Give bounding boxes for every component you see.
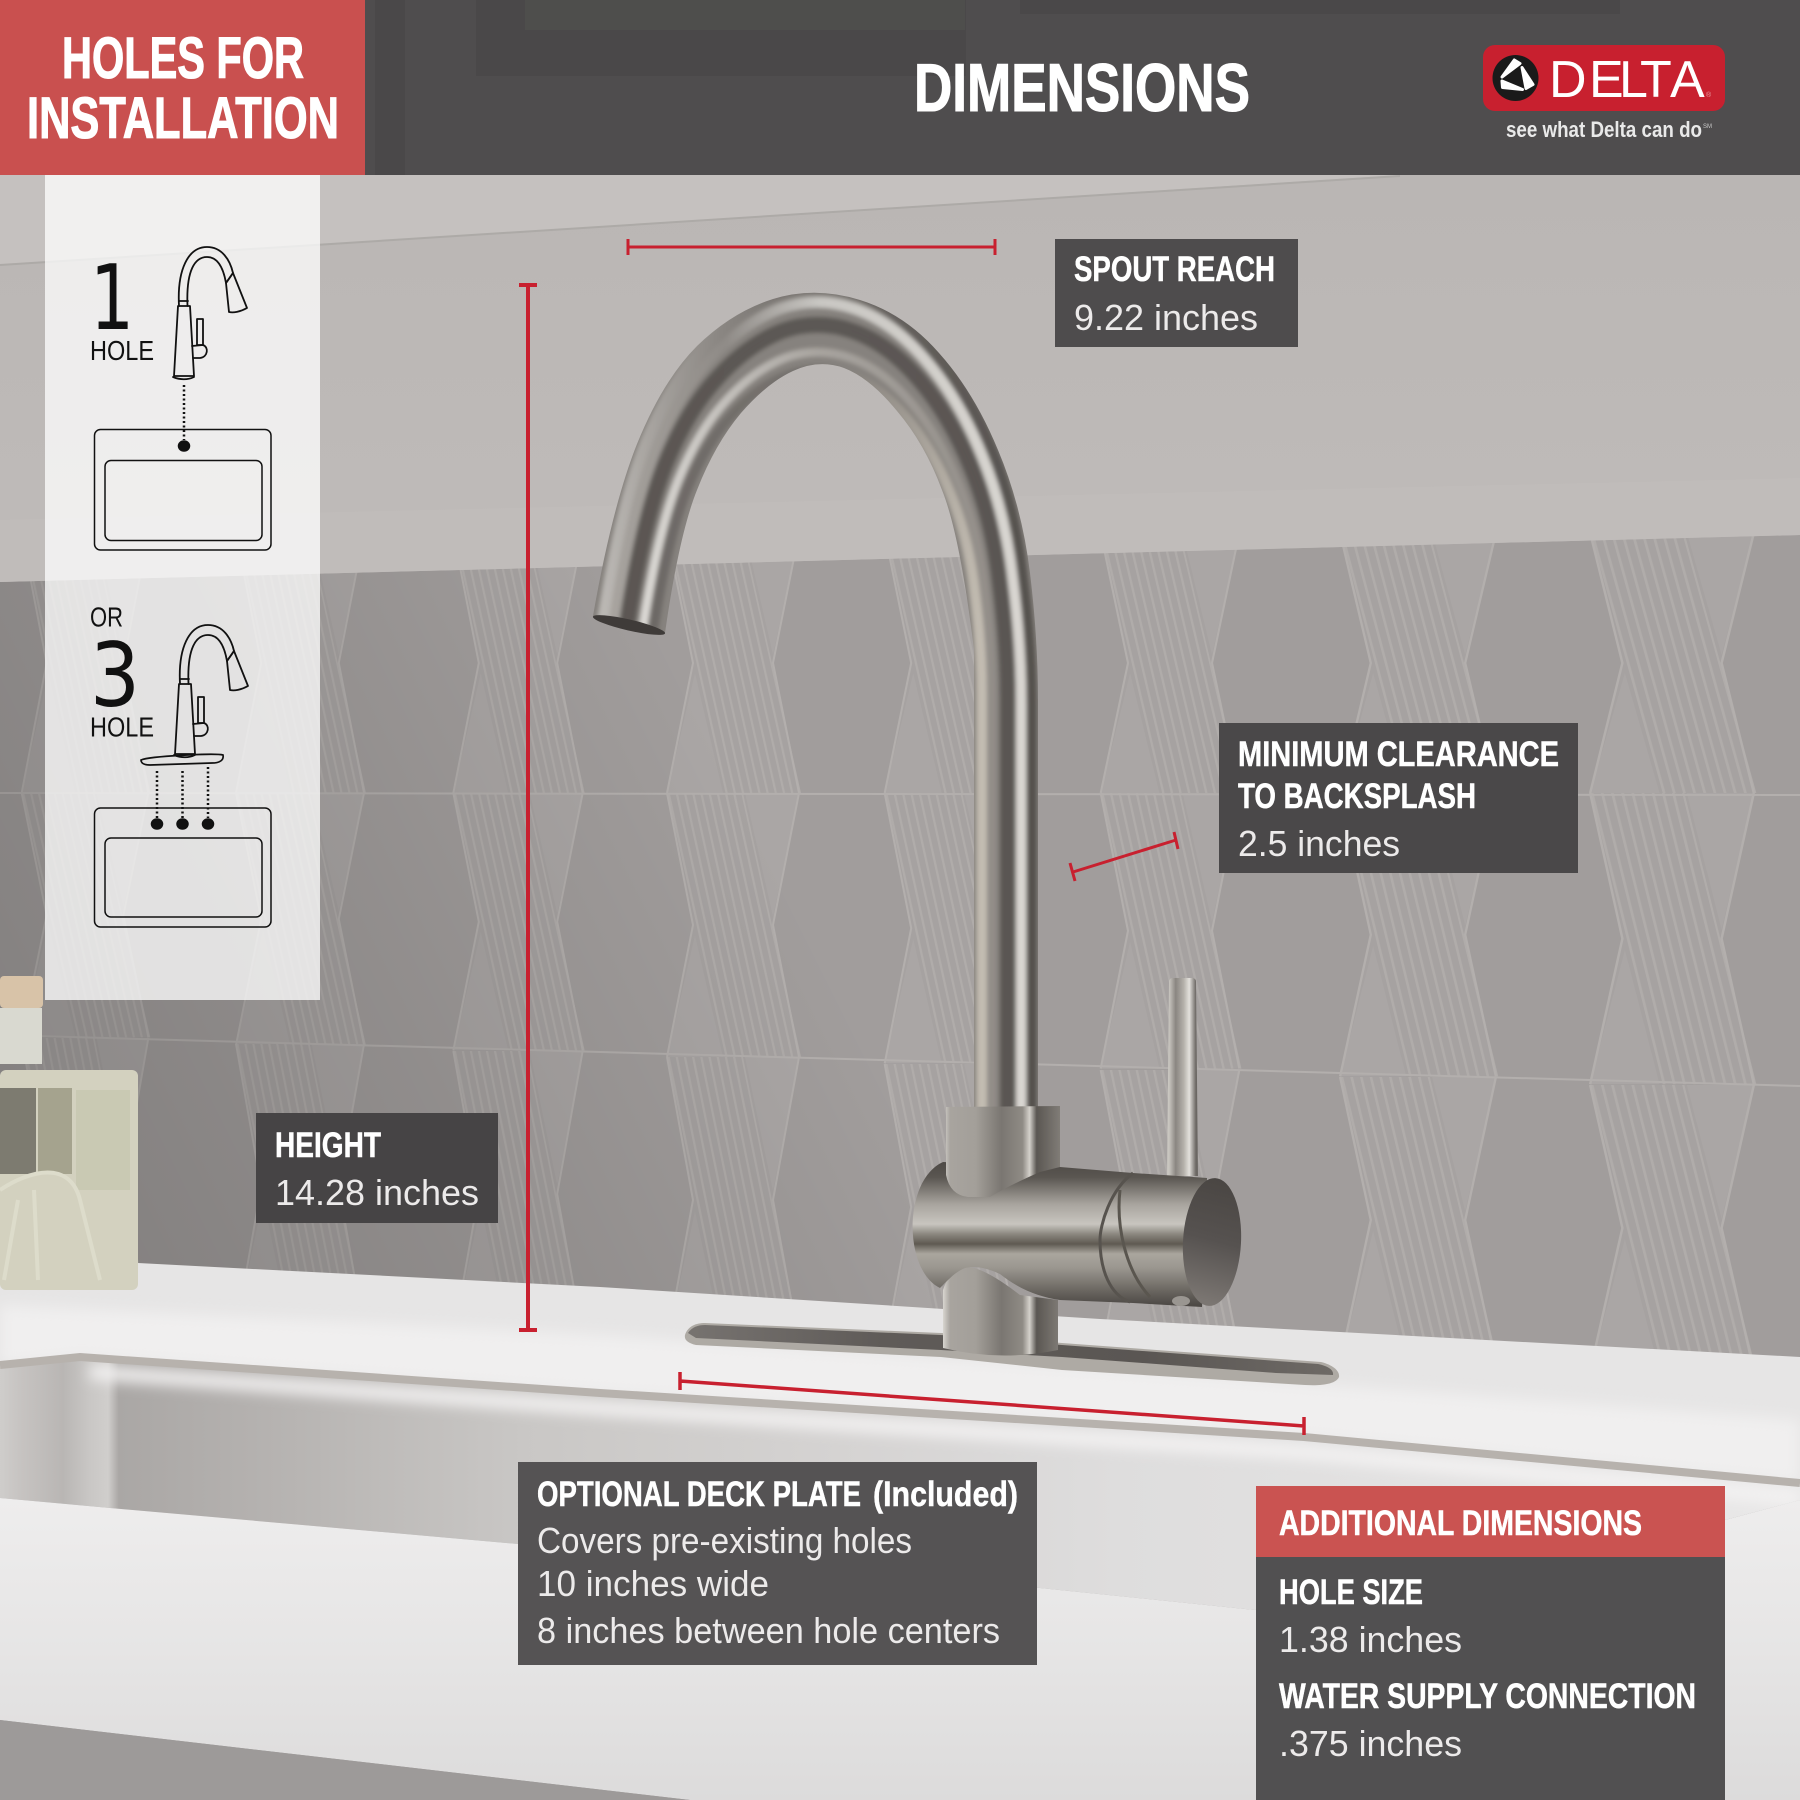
callout: height: 14.28 inches: [275, 1172, 479, 1213]
panel: additional dimensions: 1.38 inches: [1279, 1619, 1462, 1660]
heading panel: holes for installation: INSTALLATION: [27, 86, 339, 151]
icon: faucet: [173, 247, 247, 379]
deck plate: [685, 1323, 1339, 1385]
callout: optional deck plate: Covers pre-existing holes: [537, 1520, 912, 1561]
faucet: [592, 286, 1339, 1385]
icon: sink with three holes: [94, 808, 271, 927]
callout: minimum clearance: [1219, 723, 1578, 873]
callout: optional deck plate: (Included): [873, 1475, 1018, 1514]
heading panel: holes for installation: [0, 0, 365, 175]
counter top: [0, 1256, 1800, 1483]
callout: spout reach: SPOUT REACH: [1074, 250, 1275, 289]
logo: Delta: see what Delta can do: [1506, 117, 1702, 142]
3 hole option: OR: [90, 602, 123, 632]
collar: [946, 1106, 1060, 1197]
dimension line: minimum clearance: [1070, 832, 1178, 881]
callout: optional deck plate: OPTIONAL DECK PLATE: [537, 1475, 861, 1514]
logo: Delta: [1483, 45, 1725, 142]
panel: additional dimensions: WATER SUPPLY CONNECTION: [1279, 1677, 1696, 1716]
aerator: [592, 611, 666, 639]
mixer body: [913, 1162, 1207, 1307]
main title: DIMENSIONS: [914, 50, 1250, 126]
sink basin: [0, 1357, 1800, 1610]
heading panel: holes for installation: HOLES FOR: [62, 26, 304, 91]
lever: [1167, 978, 1198, 1176]
logo: Delta: ®: [1706, 91, 1712, 99]
callout: minimum clearance: 2.5 inches: [1238, 823, 1400, 864]
panel: additional dimensions: HOLE SIZE: [1279, 1573, 1423, 1612]
3 hole option: [90, 602, 271, 927]
dimension line: height: [519, 285, 537, 1330]
callout: spout reach: 9.22 inches: [1074, 297, 1258, 338]
logo: Delta: SM: [1703, 124, 1712, 130]
bottle: [0, 976, 138, 1290]
handle cap: [1180, 1177, 1244, 1307]
callout: height: HEIGHT: [275, 1126, 381, 1165]
panel heading: [1256, 1486, 1725, 1557]
1 hole option: [90, 246, 271, 550]
counter front: [0, 1498, 1800, 1800]
callout: minimum clearance: TO BACKSPLASH: [1238, 777, 1476, 816]
panel heading: ADDITIONAL DIMENSIONS: [1279, 1504, 1642, 1543]
icon: sink with one hole: [94, 430, 271, 550]
icon: Delta triangle mark: [1492, 55, 1538, 101]
lower stem: [943, 1267, 1058, 1356]
backsplash tile pattern: [0, 533, 1800, 1371]
1 hole option: 1: [90, 246, 134, 351]
callout: height: [256, 1113, 498, 1223]
logo: Delta: DELTA: [1549, 51, 1705, 109]
callout: optional deck plate: [518, 1462, 1037, 1665]
callout: minimum clearance: MINIMUM CLEARANCE: [1238, 735, 1559, 774]
callout: spout reach: [1055, 239, 1298, 347]
3 hole option: HOLE: [90, 712, 154, 742]
panel: additional dimensions: [1256, 1486, 1725, 1800]
dimension line: spout reach: [628, 239, 995, 255]
panel: additional dimensions: .375 inches: [1279, 1723, 1462, 1764]
ring joint: [1100, 1173, 1133, 1302]
icon: faucet on deck plate: [174, 625, 248, 757]
callout: optional deck plate: 8 inches between hole centers: [537, 1610, 1000, 1651]
header band: [0, 0, 1800, 175]
callout: optional deck plate: 10 inches wide: [537, 1563, 769, 1604]
panel: hole options: [45, 175, 320, 1000]
3 hole option: 3: [90, 624, 140, 727]
dimension line: deck plate: [680, 1372, 1304, 1435]
1 hole option: HOLE: [90, 335, 154, 366]
upper wall: [0, 175, 1800, 582]
spout: [593, 292, 1038, 1107]
